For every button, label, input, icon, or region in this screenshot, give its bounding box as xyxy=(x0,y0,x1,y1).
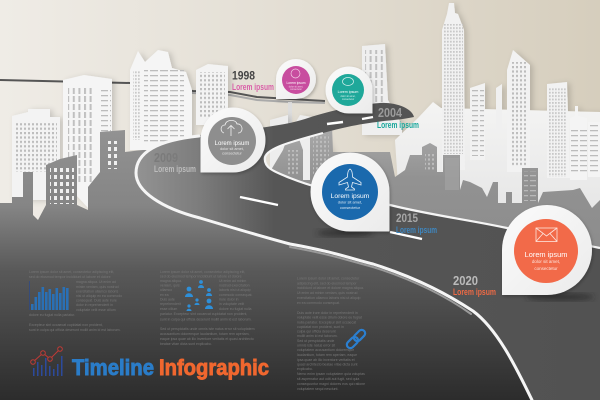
right ground silhouette xyxy=(268,122,600,260)
text block: right: voluptate velit esse cillum dolore eu fugiat xyxy=(297,316,362,320)
text block: left: Excepteur sint occaecat cupidatat non proident, xyxy=(29,323,103,327)
year label: 2020: Lorem ipsum xyxy=(453,287,496,298)
pin 2009 xyxy=(200,108,266,172)
text block: left xyxy=(29,270,122,332)
text block: middle: reprehenderit xyxy=(160,302,181,306)
text block: right: ex ea commodo consequat. xyxy=(297,301,340,305)
pin 2009: dolor sit amet, xyxy=(220,147,244,151)
text block: left: sunt in culpa qui officia deserunt mollit anim id est laborum. xyxy=(29,328,121,332)
building: tall left xyxy=(63,75,112,210)
text block: middle: laboris nisi ut aliquip xyxy=(219,288,251,292)
text block: right: omnis iste natus error sit xyxy=(297,344,335,348)
pin 2020: dolor sit amet, xyxy=(532,259,560,264)
pin 2020: Lorem ipsum xyxy=(525,250,567,259)
bar chart xyxy=(30,281,69,310)
building: annex xyxy=(470,83,485,160)
text block: middle: sed do eiusmod tempor incididunt ut labore et dolore xyxy=(160,274,242,278)
text block: right: cupidatat non proident, sunt in xyxy=(297,325,344,329)
text block: middle: Lorem ipsum dolor sit amet, consectetur adipiscing elit, xyxy=(160,270,245,274)
title: Infographic xyxy=(159,355,269,380)
road outer edge line xyxy=(136,136,532,400)
text block: right: Sed ut perspiciatis unde xyxy=(297,339,334,343)
text block: middle: beatae vitae dicta sunt explicabo. xyxy=(160,342,212,346)
pin 2015 shadow xyxy=(317,229,373,237)
pin 2020: consectetur xyxy=(534,266,558,271)
icon: airplane xyxy=(339,169,361,190)
text block: left: sed do eiusmod tempor incididunt ut labore et dolore xyxy=(29,275,111,279)
road inner edge line xyxy=(265,133,600,248)
pin 2009: consectetur xyxy=(222,152,243,156)
pin 2004: dolor sit amet, xyxy=(340,95,356,98)
grey building windows xyxy=(287,134,536,201)
pin 1998 xyxy=(276,59,316,99)
grey building windows left xyxy=(50,141,120,204)
pin 2015: Lorem ipsum xyxy=(331,193,370,200)
text block: right: Duis aute irure dolor in reprehenderit in xyxy=(297,311,358,315)
building: behind pins xyxy=(362,44,402,135)
text block: right: adipiscing elit, sed do eiusmod tempor xyxy=(297,282,357,286)
pin 1998: Lorem ipsum xyxy=(286,81,306,85)
year label: 2020 xyxy=(453,273,496,298)
pin 2020 shadow xyxy=(526,293,594,301)
text block: right: culpa qui officia deserunt xyxy=(297,330,336,334)
building: centre-left small xyxy=(196,64,228,125)
pin 1998: consectetur xyxy=(290,88,302,91)
text block: middle: in voluptate velit xyxy=(219,302,244,306)
pin 2004: consectetur xyxy=(342,98,354,101)
pin 2009: Lorem ipsum xyxy=(215,141,249,147)
year label: 1998: Lorem ipsum xyxy=(232,82,274,93)
left ground and lower dark panel xyxy=(0,130,560,400)
icon: envelope xyxy=(536,228,557,242)
text block: middle: nostrud exercitation xyxy=(219,284,250,288)
text block: right: ipsa quae ab illo inventore veritatis et xyxy=(297,358,355,362)
text block: middle: Ut enim ad minim xyxy=(219,279,246,283)
building: right tower xyxy=(547,82,570,178)
pin 2004: Lorem ipsum xyxy=(338,90,358,94)
building: pointed tower xyxy=(507,50,530,172)
text block: left: voluptate velit esse cillum xyxy=(76,308,116,312)
text block: middle: commodo consequat. xyxy=(219,293,252,297)
year label: 2020: 2020 xyxy=(453,273,478,288)
text block: left: magna aliqua. Ut enim ad xyxy=(76,280,116,284)
city skyline: white paper buildings xyxy=(12,3,600,215)
text block: middle xyxy=(160,270,255,346)
year label: 1998: 1998 xyxy=(232,68,255,82)
logo: line and bar chart xyxy=(31,347,62,376)
road dashes xyxy=(240,117,422,239)
year label: 2004 xyxy=(377,105,419,131)
year label: 2009: Lorem ipsum xyxy=(154,164,196,175)
title: Timeline xyxy=(72,355,154,380)
icon: people network xyxy=(185,280,213,311)
year label: 1998 xyxy=(232,68,274,93)
text block: right: quasi architecto beatae vitae dicta sunt xyxy=(297,362,358,366)
text block: right: exercitation ullamco laboris nisi ut aliquip xyxy=(297,296,360,300)
text block: middle: pariatur. Excepteur sint occaecat cupidatat non proident, xyxy=(160,312,247,316)
text block: right: Ut enim ad minim veniam, quis nostrud xyxy=(297,291,358,295)
year label: 2004: 2004 xyxy=(378,105,403,120)
building: far right xyxy=(570,106,600,180)
road xyxy=(135,103,600,400)
text block: middle: esse cillum xyxy=(160,307,177,311)
year label: 2015: 2015 xyxy=(396,211,418,225)
year label: 2015: Lorem ipsum xyxy=(396,225,437,235)
text block: middle: ex ea xyxy=(160,293,169,297)
text block: right: Nemo enim ipsam voluptatem quia voluptas xyxy=(297,372,365,376)
text block: left: minim veniam, quis nostrud xyxy=(76,285,119,289)
text block: middle: accusantium doloremque laudantium, totam rem aperiam, xyxy=(160,332,250,336)
building: mid white xyxy=(270,115,335,190)
text block: right: nulla pariatur. Excepteur sint occaecat xyxy=(297,320,356,324)
year label: 2009: 2009 xyxy=(154,150,178,165)
text block: right: incididunt ut labore et dolore magna aliqua. xyxy=(297,286,364,290)
year label: 2015 xyxy=(396,211,437,235)
elevated highway xyxy=(0,80,325,137)
pin 2015 xyxy=(310,153,390,232)
building: narrow xyxy=(496,84,502,130)
pin 2015: consectetur xyxy=(340,205,361,210)
pin 2020 xyxy=(502,205,592,295)
icon: chain link xyxy=(345,328,367,350)
icon: cloud upload xyxy=(221,120,242,136)
text block: right: mollit anim id est laborum. xyxy=(297,334,338,338)
text block: middle: dolore eu fugiat nulla xyxy=(219,307,252,311)
text block: right: Lorem ipsum dolor sit amet, consectetur xyxy=(297,276,360,280)
text block: middle: veniam, quis xyxy=(160,284,180,288)
text block: left: nisi ut aliquip ex ea commodo xyxy=(76,294,122,298)
text block: middle: Duis aute xyxy=(160,298,175,302)
text block: left: exercitation ullamco laboris xyxy=(76,290,118,294)
text block: middle: ullamco xyxy=(160,288,172,292)
text block: right: explicabo. xyxy=(297,367,313,371)
pin 2004 xyxy=(326,66,372,114)
text block: middle: sunt in culpa qui officia deserunt mollit anim id est laborum. xyxy=(160,318,252,322)
pin 2015: dolor sit amet, xyxy=(338,200,362,204)
text block: left: dolore eu fugiat nulla pariatur. xyxy=(29,313,75,317)
text block: middle: Sed ut perspiciatis unde omnis iste natus error sit voluptatem xyxy=(160,327,255,331)
building: wide centre-left xyxy=(130,50,192,150)
building: main tower xyxy=(442,3,465,170)
text block: middle: magna aliqua. xyxy=(160,279,182,283)
text block: right: laudantium, totam rem aperiam, eaque xyxy=(297,353,357,357)
text block: right: voluptatem sequi nesciunt. xyxy=(297,387,338,391)
text block: left: dolor in reprehenderit in xyxy=(76,303,113,307)
text block: middle: irure dolor in xyxy=(219,298,239,302)
text block: right xyxy=(297,276,365,391)
year label: 2004: Lorem ipsum xyxy=(377,120,419,131)
text block: left: consequat. Duis aute irure xyxy=(76,298,117,302)
text block: right: sit aspernatur aut odit aut fugit, sed quia xyxy=(297,377,359,381)
text block: middle: eaque ipsa quae ab illo inventore veritatis et quasi architecto xyxy=(160,337,254,341)
pin 1998: dolor sit amet, xyxy=(289,86,304,88)
text block: right: voluptatem accusantium doloremque xyxy=(297,348,354,352)
text block: right: consequuntur magni dolores eos qui ratione xyxy=(297,382,365,386)
title xyxy=(72,355,269,380)
text block: left: Lorem ipsum dolor sit amet, consectetur adipiscing elit, xyxy=(29,270,114,274)
building: left block xyxy=(12,109,60,200)
year label: 2009 xyxy=(154,150,196,175)
